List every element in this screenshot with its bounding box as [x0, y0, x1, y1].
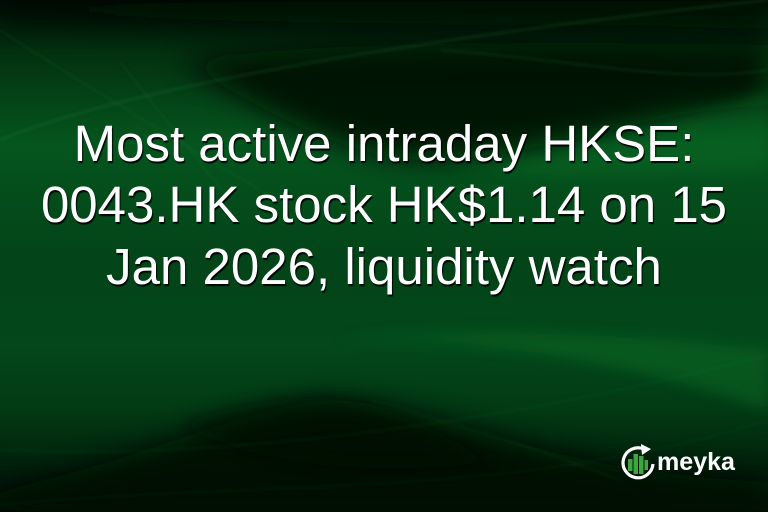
wordmark: meyka — [657, 448, 736, 476]
icon: circular arrow with bars — [623, 444, 653, 478]
title — [41, 115, 727, 297]
text: Most active intraday HKSE: — [74, 115, 694, 172]
bottom bright band — [330, 333, 768, 410]
text: Jan 2026, liquidity watch — [106, 238, 662, 295]
top dark wave — [180, 43, 768, 160]
top right green glow — [440, 90, 768, 175]
text: 0043.HK stock HK$1.14 on 15 — [41, 176, 727, 233]
logo: meyka — [621, 444, 736, 480]
bottom dark wave — [0, 400, 768, 512]
